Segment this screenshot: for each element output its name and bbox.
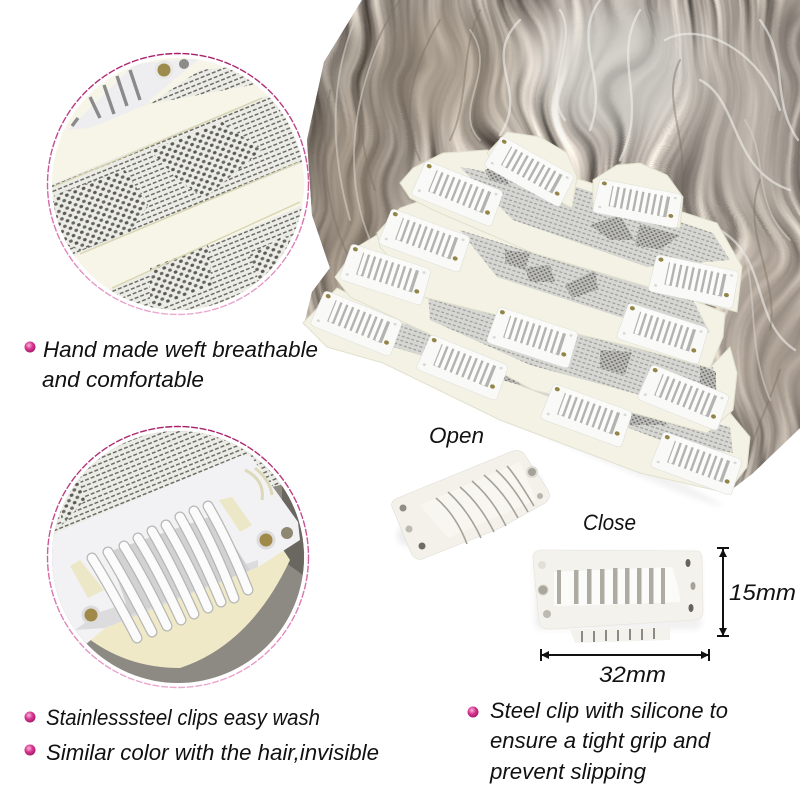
- dashed ring: [48, 54, 308, 314]
- weft tier 4, bottom: [303, 288, 750, 493]
- weft tier 3: [335, 235, 737, 433]
- text: stainless steel clips: Stainlesssteel clips easy wash: [46, 705, 320, 730]
- dimension: 15mm arrow: [717, 548, 796, 636]
- hairpiece: wefts with lace and clips: [303, 132, 750, 496]
- icon: open clip: [388, 451, 552, 563]
- clip slots: [70, 560, 104, 598]
- bullet: [24, 744, 36, 756]
- text: hand made weft: and comfortable: [42, 367, 204, 392]
- circle detail: weft and lace close-up: [45, 54, 310, 330]
- small piece left: [487, 132, 577, 208]
- dimension: 15mm arrow: 15mm: [729, 580, 796, 605]
- bullet: [24, 342, 36, 352]
- stitched weft line: [55, 98, 300, 288]
- bullet: [468, 706, 478, 718]
- bullet: [24, 712, 36, 722]
- clip teeth: [92, 506, 248, 638]
- text: steel clip with silicone: Steel clip with silicone to: [490, 698, 728, 723]
- text: similar color: Similar color with the hair,invisible: [46, 740, 379, 765]
- text: hand made weft: [24, 337, 318, 392]
- label: open: Open: [429, 423, 484, 448]
- dimension: 32mm arrow: [541, 649, 709, 687]
- weft tier 2: [377, 202, 725, 368]
- text: steel clip with silicone: [468, 698, 728, 784]
- dimension: 32mm arrow: 32mm: [599, 662, 666, 687]
- text: steel clip with silicone: ensure a tight grip and: [490, 728, 711, 753]
- circle detail: clip close-up: [45, 426, 310, 690]
- photo: wavy ash blonde hair: [304, 0, 800, 488]
- top clip: [68, 58, 200, 130]
- brass eyelets: [83, 607, 99, 623]
- label: close: Close: [583, 510, 636, 535]
- hair clips on the wefts: [310, 135, 744, 496]
- dashed ring: [48, 426, 308, 688]
- small piece right: [593, 163, 683, 228]
- clip photo: [45, 430, 310, 690]
- soft white glow under the hairpiece: [354, 336, 726, 514]
- weft tier 1, top: [400, 150, 742, 312]
- icon: closed clip: [533, 550, 703, 643]
- text: steel clip with silicone: prevent slipping: [489, 759, 647, 784]
- text: hand made weft: Hand made weft breathable: [43, 337, 318, 362]
- lace and weft photo: [52, 58, 304, 310]
